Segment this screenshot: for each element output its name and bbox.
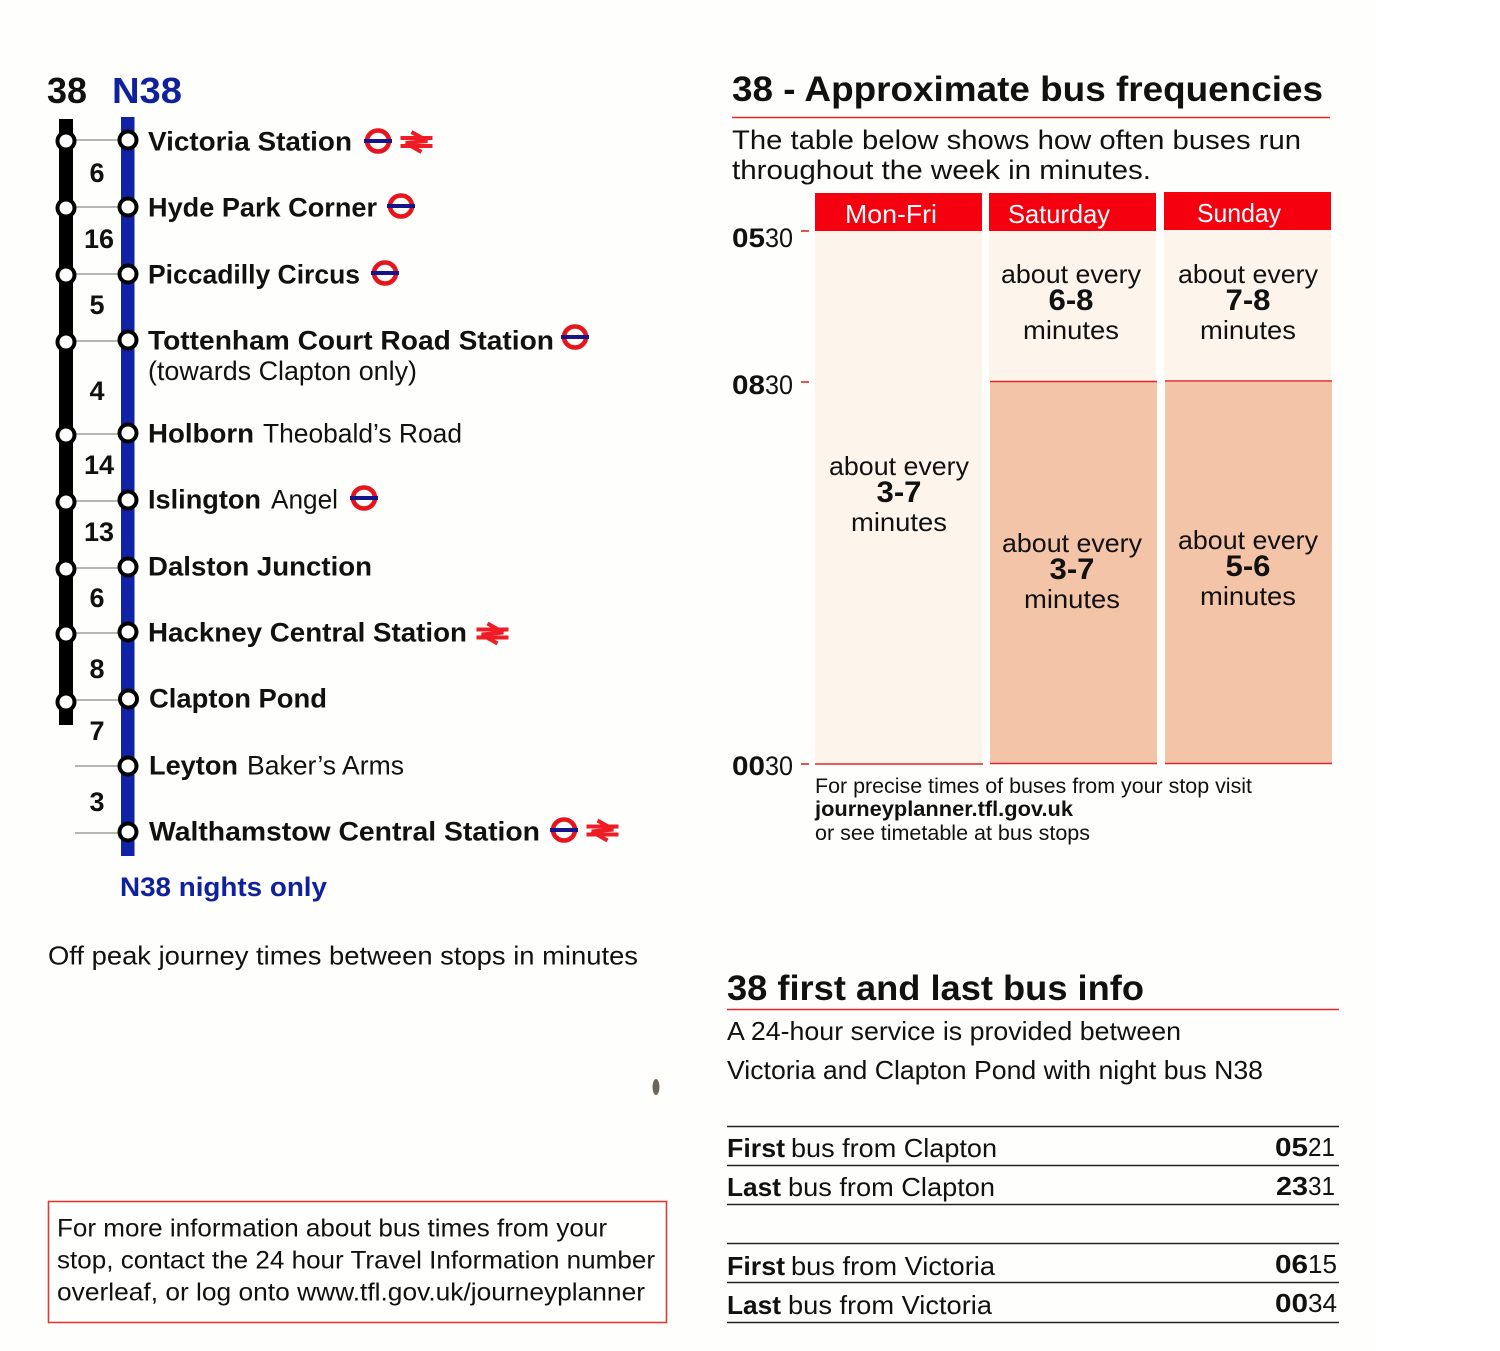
column: Sunday: minutes — [1200, 581, 1296, 611]
journey times between stops: 6 — [89, 158, 105, 188]
callout: more information: overleaf, or log onto www.tfl.gov.uk/journeyplanner — [57, 1278, 645, 1306]
time axis labels: 05 — [732, 223, 765, 253]
route heading: 38: 38 — [47, 70, 87, 111]
journey times between stops: 4 — [89, 376, 105, 406]
journey times between stops: 5 — [89, 290, 105, 320]
footnote: precise times: or see timetable at bus stops — [815, 822, 1090, 845]
table: Clapton first and last buses: 21 — [1308, 1132, 1335, 1162]
time axis labels: 30 — [765, 751, 793, 781]
stop: Victoria Station: Victoria Station — [148, 126, 352, 156]
intro text: 24-hour service: Victoria and Clapton Pond with night bus N38 — [727, 1055, 1263, 1085]
journey times between stops — [84, 158, 114, 817]
time axis labels: 00 — [732, 751, 765, 781]
column: Saturday: 6-8 — [1048, 284, 1094, 317]
stop: Leyton: Leyton — [149, 750, 238, 780]
column: Saturday: about every — [1001, 259, 1141, 289]
column: Mon-Fri — [815, 193, 983, 764]
stop markers: N38 — [120, 132, 137, 840]
time axis labels: 30 — [765, 370, 793, 400]
stop markers: 38 — [58, 132, 74, 710]
column: Saturday: minutes — [1024, 584, 1120, 614]
table: Clapton first and last buses: bus from Clapton — [788, 1172, 995, 1202]
callout: more information — [48, 1202, 666, 1322]
column: Mon-Fri: about every — [829, 451, 969, 481]
table: Clapton first and last buses: Last — [727, 1172, 781, 1202]
table: Clapton first and last buses: 05 — [1275, 1132, 1308, 1162]
table: Clapton first and last buses: 31 — [1308, 1171, 1335, 1201]
journey times between stops: 16 — [84, 224, 114, 254]
icon: underground roundel, Piccadilly Circus — [371, 262, 399, 284]
icon: underground roundel, Hyde Park Corner — [387, 196, 415, 216]
heading: bus frequencies: 38 - Approximate bus frequencies — [732, 70, 1323, 109]
stop: Islington: Islington — [148, 484, 261, 514]
stop: Walthamstow Central Station: Walthamstow Central Station — [149, 816, 540, 846]
column: Sunday: minutes — [1200, 315, 1296, 345]
journey times between stops: 7 — [89, 716, 105, 746]
table: Victoria first and last buses: First — [727, 1251, 785, 1281]
callout: more information: For more information about bus times from your — [57, 1214, 607, 1242]
journey times between stops: 3 — [89, 787, 105, 817]
icon: underground roundel, Walthamstow — [550, 820, 578, 840]
caption: journey times: Off peak journey times between stops in minutes — [48, 940, 638, 970]
footnote: precise times: journeyplanner.tfl.gov.uk — [814, 798, 1073, 821]
column: Sunday: about every — [1178, 525, 1318, 555]
intro text: frequencies — [732, 125, 1301, 185]
stop: Piccadilly Circus: Piccadilly Circus — [148, 260, 360, 290]
icon: national rail, Hackney Central — [476, 624, 508, 644]
callout: more information: stop, contact the 24 hour Travel Information number — [57, 1246, 655, 1274]
panel: route diagram — [47, 70, 618, 856]
table: Clapton first and last buses — [727, 1126, 1339, 1204]
intro text: frequencies: The table below shows how often buses run — [732, 125, 1301, 155]
intro text: 24-hour service — [727, 1016, 1263, 1085]
stop: Holborn: Holborn — [148, 418, 254, 448]
intro text: frequencies: throughout the week in minutes. — [732, 155, 1151, 185]
journey times between stops: 8 — [89, 654, 105, 684]
column: Sunday: about every — [1178, 259, 1318, 289]
journey times between stops: 14 — [84, 450, 114, 480]
stop detail: Angel: Angel — [271, 484, 338, 514]
column: Mon-Fri: 3-7 — [876, 476, 922, 509]
heading: first and last bus: 38 first and last bus info — [727, 969, 1144, 1008]
note: N38 nights only: N38 nights only — [120, 872, 327, 902]
stop: Hyde Park Corner: Hyde Park Corner — [148, 192, 377, 222]
stop: Clapton Pond: Clapton Pond — [149, 684, 327, 714]
stop: Tottenham Court Road Station: Tottenham Court Road Station — [148, 326, 554, 356]
time axis labels: 30 — [765, 223, 793, 253]
journey times between stops: 13 — [84, 517, 114, 547]
stop: Hackney Central Station: Hackney Central Station — [148, 618, 467, 648]
icon: underground roundel, Angel — [350, 488, 378, 508]
table: Victoria first and last buses: bus from Victoria — [788, 1290, 993, 1320]
column: Saturday: minutes — [1023, 315, 1119, 345]
footnote: precise times: For precise times of buses from your stop visit — [815, 775, 1252, 798]
table: Victoria first and last buses: 34 — [1308, 1288, 1337, 1318]
route line: 38 — [59, 119, 73, 725]
table: Victoria first and last buses: bus from Victoria — [791, 1251, 996, 1281]
table: Victoria first and last buses: 00 — [1275, 1288, 1308, 1318]
column: Saturday: Saturday — [1008, 199, 1110, 229]
table: Victoria first and last buses: 06 — [1275, 1249, 1308, 1279]
stop detail: Theobald's Road: Theobald’s Road — [263, 418, 462, 448]
column: Mon-Fri: Mon-Fri — [845, 199, 937, 229]
table: Clapton first and last buses: bus from Clapton — [791, 1133, 997, 1163]
table: Victoria first and last buses: 15 — [1308, 1249, 1337, 1279]
table: Clapton first and last buses: 23 — [1276, 1171, 1308, 1201]
column: Sunday: 7-8 — [1226, 284, 1270, 317]
chart: frequency table — [732, 192, 1332, 781]
intro text: 24-hour service: A 24-hour service is provided between — [727, 1016, 1181, 1046]
stop note: towards Clapton only: (towards Clapton only) — [148, 356, 417, 386]
table: Clapton first and last buses: First — [727, 1133, 785, 1163]
stop detail: Baker's Arms: Baker’s Arms — [247, 750, 404, 780]
icon: national rail, Victoria — [400, 132, 432, 152]
column: Saturday: about every — [1002, 528, 1142, 558]
column: Saturday: 3-7 — [1050, 553, 1094, 586]
journey times between stops: 6 — [89, 583, 105, 613]
route heading: N38: N38 — [112, 70, 182, 111]
table: Victoria first and last buses: Last — [727, 1290, 781, 1320]
icon: underground roundel, Tottenham Court Road — [561, 326, 589, 348]
route line: N38 — [121, 117, 134, 856]
footnote: precise times — [814, 775, 1252, 845]
time axis labels: 08 — [732, 370, 765, 400]
column: Saturday — [989, 193, 1157, 764]
time axis labels — [732, 223, 809, 781]
column: Sunday: Sunday — [1197, 198, 1281, 228]
table: Victoria first and last buses — [727, 1244, 1339, 1322]
stop: Dalston Junction: Dalston Junction — [148, 552, 372, 582]
column: Sunday — [1164, 192, 1332, 764]
column: Sunday: 5-6 — [1226, 550, 1270, 583]
column: Mon-Fri: minutes — [851, 507, 947, 537]
icon: underground roundel, Victoria — [364, 130, 392, 152]
icon: national rail, Walthamstow — [586, 820, 618, 840]
